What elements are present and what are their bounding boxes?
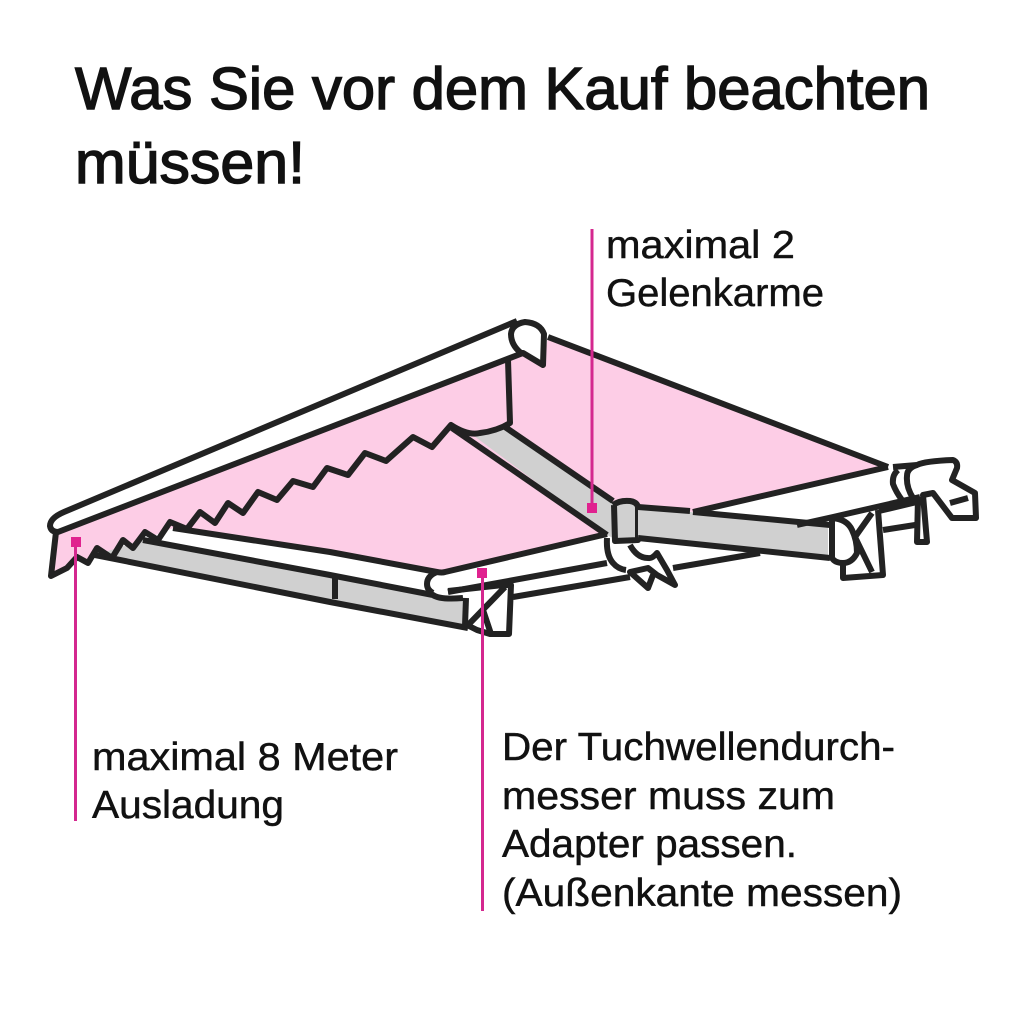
center joint — [613, 501, 638, 541]
callout marker: Tuchwelle — [477, 568, 487, 911]
front left bracket — [448, 585, 511, 634]
label: maximal 8 Meter Ausladung: maximal 8 Meter — [92, 736, 398, 779]
label: Tuchwellendurchmesser: Der Tuchwellendurch- — [502, 726, 895, 769]
side rail lines — [173, 497, 920, 597]
label: maximal 2 Gelenkarme — [606, 224, 824, 315]
title: müssen! — [75, 130, 305, 196]
middle gray arm — [452, 427, 613, 538]
label: maximal 2 Gelenkarme: Gelenkarme — [606, 272, 824, 315]
right elbow bracket — [832, 502, 917, 578]
label: Tuchwellendurchmesser: messer muss zum — [502, 775, 835, 818]
label: maximal 8 Meter Ausladung — [92, 736, 398, 827]
center bracket — [607, 538, 675, 588]
label: maximal 2 Gelenkarme: maximal 2 — [606, 224, 795, 267]
awning illustration — [49, 320, 976, 634]
right wall mount — [893, 460, 976, 542]
panel: pink awning fabric — [52, 337, 885, 577]
left gray arm — [95, 540, 468, 628]
right gray arm — [638, 507, 830, 558]
callout marker: maximal 2 Gelenkarme — [587, 229, 597, 513]
label: maximal 8 Meter Ausladung: Ausladung — [92, 784, 284, 827]
title: Was Sie vor dem Kauf beachten — [75, 56, 930, 122]
panel: white parts of arms and roller — [143, 528, 630, 597]
title — [75, 56, 930, 196]
fabric edges — [548, 337, 888, 467]
valance edge — [51, 360, 510, 576]
front roller — [49, 320, 544, 532]
callout marker: Ausladung — [71, 537, 81, 821]
label: Tuchwellendurchmesser: Adapter passen. — [502, 823, 797, 866]
label: Tuchwellendurchmesser: (Außenkante messen) — [502, 872, 902, 915]
label: Tuchwellendurchmesser — [502, 726, 902, 915]
